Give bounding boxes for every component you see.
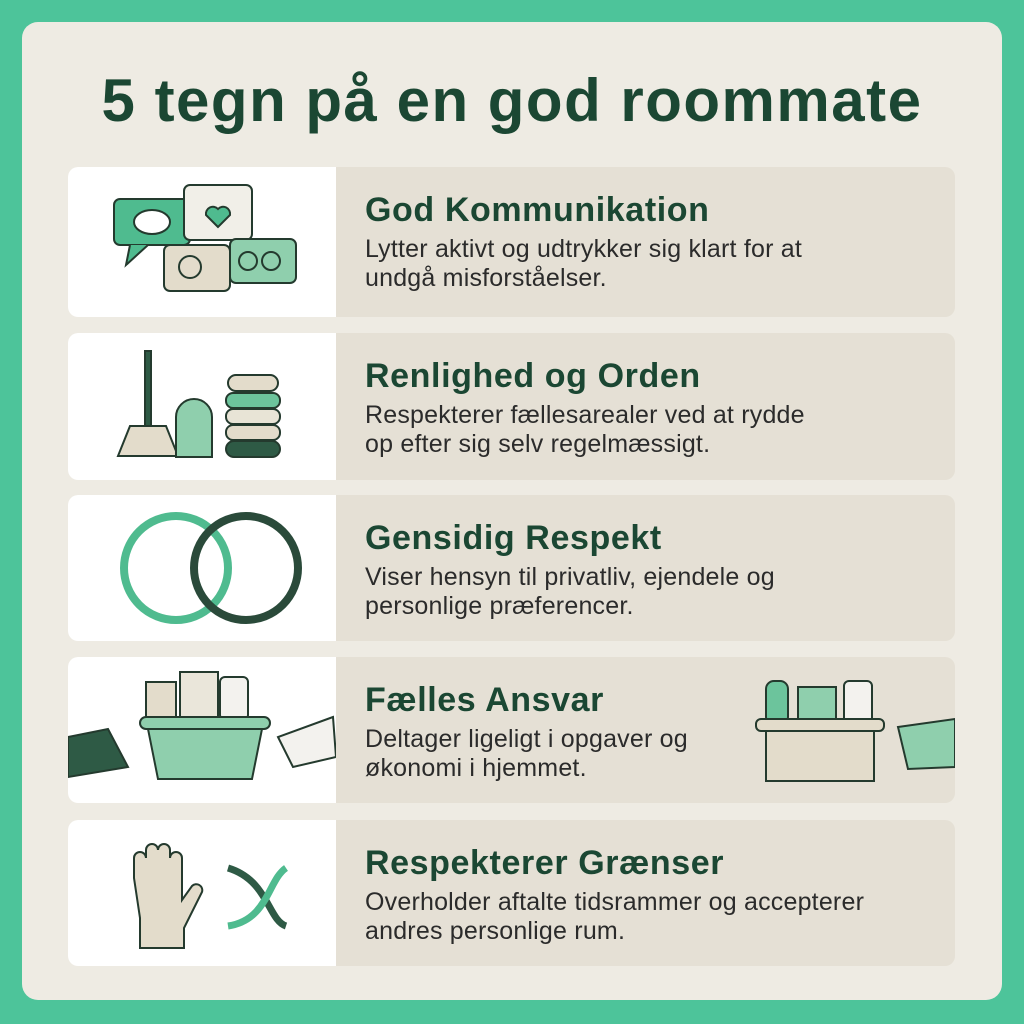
panel: shared responsibility: [68, 657, 955, 803]
icon: second basket: [755, 680, 955, 782]
panel: respect: Viser hensyn til privatliv, ejendele og: [365, 563, 775, 591]
panel: boundaries: Respekterer Grænser: [365, 844, 724, 882]
panel: communication: God Kommunikation: [365, 191, 710, 229]
panel: shared responsibility: Deltager ligeligt i opgaver og: [365, 725, 688, 753]
panel: cleanliness: op efter sig selv regelmæssigt.: [365, 430, 710, 458]
panel: cleanliness: [68, 333, 955, 480]
icon: hand and X: [68, 820, 336, 966]
text block: [365, 191, 802, 292]
panel: shared responsibility: Fælles Ansvar: [365, 681, 604, 719]
panel: communication: undgå misforståelser.: [365, 264, 607, 292]
text block: [365, 681, 688, 782]
panel: boundaries: Overholder aftalte tidsrammer og accepterer: [365, 888, 864, 916]
text block: [365, 519, 775, 620]
title: 5 tegn på en god roommate: [102, 67, 922, 134]
panel: cleanliness: Renlighed og Orden: [365, 357, 701, 395]
panel: respect: personlige præferencer.: [365, 592, 634, 620]
panel: respect: [68, 495, 955, 641]
panel: boundaries: andres personlige rum.: [365, 917, 625, 945]
icon: chat bubbles: [68, 167, 336, 317]
panel: cleanliness: Respekterer fællesarealer ved at rydde: [365, 401, 805, 429]
icon: broom and towels: [68, 333, 336, 480]
panel: respect: Gensidig Respekt: [365, 519, 662, 557]
icon: interlocking circles: [68, 495, 336, 641]
icon: basket and hands: [68, 657, 336, 803]
text block: [365, 357, 805, 458]
panel: boundaries: [68, 820, 955, 966]
text block: [365, 844, 864, 945]
panel: shared responsibility: økonomi i hjemmet.: [365, 754, 587, 782]
panel: communication: [68, 167, 955, 317]
panel: communication: Lytter aktivt og udtrykker sig klart for at: [365, 235, 802, 263]
